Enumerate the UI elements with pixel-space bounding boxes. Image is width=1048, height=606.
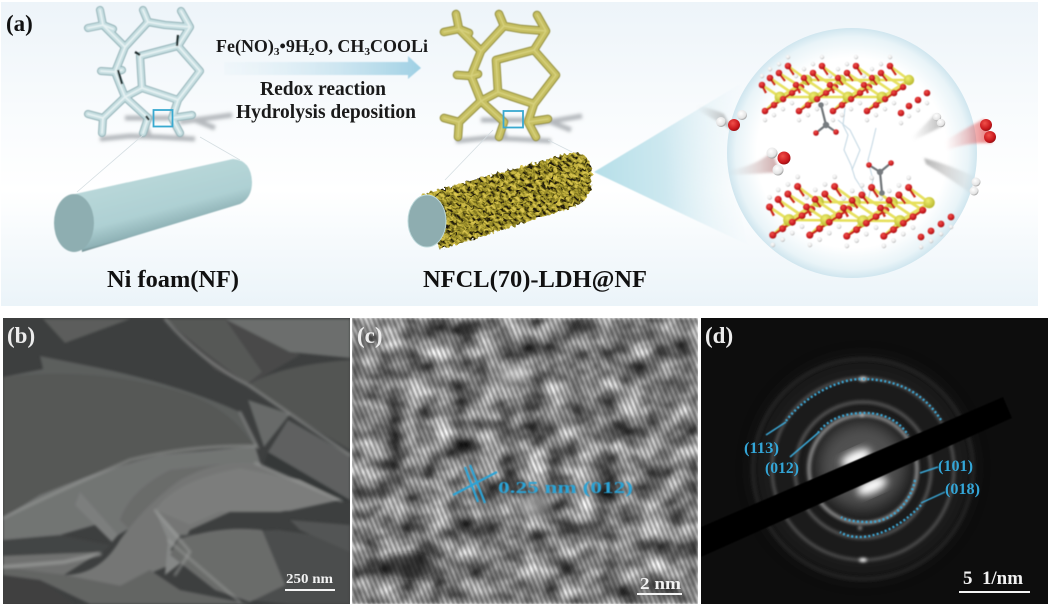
arrow: reaction — [224, 56, 421, 79]
panel: (c) HRTEM image — [352, 318, 698, 604]
SEM sheets — [3, 319, 350, 604]
scale bar 5 1/nm: 5 1/nm — [963, 568, 1023, 589]
molecule: incoming H2O lower — [727, 148, 790, 176]
icon: zoom box on coated foam — [504, 111, 523, 128]
label (101): (101) — [938, 458, 973, 475]
annotation 0.25 nm (012): 0.25 nm (012) — [498, 478, 633, 497]
reagent text: Fe(NO) — [216, 36, 272, 56]
fringe measurement marks — [453, 465, 497, 503]
panel background — [1, 2, 1038, 306]
label (a): (a) — [6, 11, 33, 36]
panel: (b) SEM image — [3, 318, 350, 604]
beam stop — [701, 397, 1012, 557]
scale bar 2 nm — [637, 578, 682, 595]
label (b): (b) — [7, 323, 35, 348]
label (113): (113) — [744, 440, 779, 457]
reagent text: 3 — [364, 46, 371, 58]
label: NFCL(70)-LDH@NF: NFCL(70)-LDH@NF — [423, 267, 647, 293]
reagent text: 2 — [309, 46, 315, 58]
icon: Ni rod cylinder — [54, 159, 252, 252]
icon: LDH coated rod — [408, 152, 594, 250]
label (012): (012) — [765, 460, 799, 477]
scale bar 250 nm: 250 nm — [286, 572, 333, 587]
ring annotations — [766, 379, 945, 537]
reagent text: •9H — [280, 36, 309, 56]
icon: coated foam skeleton — [444, 14, 582, 141]
lightning wisps — [838, 108, 876, 200]
reagent text: COOLi — [370, 36, 428, 56]
zoom guide lines Ni — [77, 135, 240, 192]
label (c): (c) — [357, 323, 383, 348]
panel: (d) SAED pattern — [701, 318, 1048, 604]
icon: magnified sphere — [727, 28, 977, 278]
zoom guide lines coated — [445, 130, 572, 180]
diffraction glow — [753, 358, 973, 578]
SEM bright edges — [3, 319, 350, 602]
text: Redox reaction: Redox reaction — [260, 78, 386, 100]
acetate upper — [813, 102, 839, 136]
magnification cone — [594, 81, 748, 245]
label (018): (018) — [945, 481, 980, 498]
diffraction spots — [858, 377, 867, 562]
acetate lower — [866, 160, 894, 196]
molecule: outgoing O2 — [945, 119, 996, 150]
SEM photo base — [3, 318, 350, 604]
crystal layer: upper LDH — [759, 55, 930, 125]
panel: (a) synthesis schematic — [1, 2, 1038, 306]
molecule: outgoing H2 upper — [912, 113, 945, 140]
dark and bright patches — [380, 366, 549, 580]
diffraction rings — [753, 359, 973, 579]
label (d): (d) — [705, 323, 733, 348]
molecule: incoming H2O upper — [697, 106, 747, 131]
HRTEM photo texture — [352, 318, 698, 604]
icon: Ni foam skeleton — [88, 10, 232, 139]
reagent text: O, CH — [314, 36, 365, 56]
scale bar 250 nm — [285, 574, 335, 591]
crystal layer: lower LDH — [766, 174, 954, 249]
lattice fringes — [352, 318, 698, 604]
text: Hydrolysis deposition: Hydrolysis deposition — [236, 101, 416, 123]
scale bar 5 1/nm — [959, 572, 1030, 593]
reagent text: 3 — [274, 46, 280, 58]
SAED background — [701, 318, 1048, 604]
scale bar 2 nm: 2 nm — [640, 574, 681, 593]
molecule: outgoing H2 lower — [924, 158, 980, 196]
label: Ni foam(NF): Ni foam(NF) — [107, 267, 239, 293]
icon: zoom box on Ni foam — [154, 110, 172, 126]
